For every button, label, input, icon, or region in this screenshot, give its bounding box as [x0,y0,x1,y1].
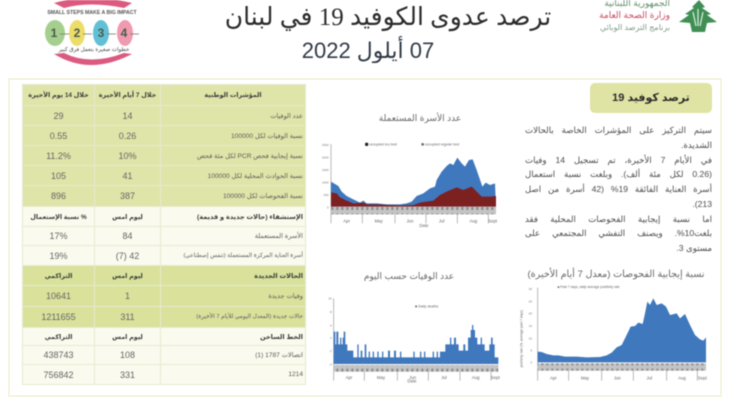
table: national indicators: 387 [120,191,135,201]
chart: PCR positivity area chart: May [581,375,590,380]
logo: small steps campaign: SMALL STEPS MAKE A BIG IMPACT [47,10,137,16]
logo: ministry of public health: برنامج الترصد الوبائي [600,23,670,32]
chart: occupied beds area chart: Jul [439,219,444,224]
chart: PCR positivity area chart: 25 [529,299,532,303]
table: national indicators: المؤشرات الوطنية [204,92,262,99]
chart: occupied beds area chart: Sept [488,219,498,224]
table: national indicators: ليوم امس [112,214,143,220]
table: national indicators: نسبة الحوادث المحلية لكل 100000 [208,172,303,180]
chart: PCR positivity area chart: Apr [550,375,557,380]
table: national indicators: خلال 7 أيام الأخيرة [99,92,156,99]
table: national indicators: الحالات الجديدة [254,272,303,280]
table: national indicators: الإستشفاء (حالات جديدة و قديمة) [197,214,303,220]
table: national indicators: اتصالات 1787 (1) [255,352,303,359]
text block: summary [524,125,712,254]
table: national indicators [22,84,306,386]
table: national indicators: 0.55 [50,130,67,140]
chart: occupied beds area chart: 500 [324,193,329,197]
chart: occupied beds area chart: occupied icu bed [369,143,397,147]
chart: daily deaths step chart: 10 [328,297,332,301]
logo: ministry of public health: وزارة الصحة العامة [599,10,670,20]
chart: daily deaths step chart: 2 [330,349,332,353]
chart: occupied beds area chart: 2500 [322,143,329,147]
text block: summary: اما نسبة إيجابية الفحوصات المحلية فقد [525,214,712,224]
chart: occupied beds area chart: 1500 [322,168,329,172]
text block: summary: أسرة العناية الفائقة 19% (42 أسرة من اصل [525,184,712,194]
chart: occupied beds area chart: Date [419,223,429,228]
chart: occupied beds area chart [322,142,498,228]
chart: daily deaths step chart: Date [407,378,417,383]
chart: daily deaths step chart: Jun [409,375,417,380]
table: national indicators: 331 [120,370,135,380]
chart: daily deaths step chart: Aug [472,375,480,380]
chart title: daily deaths: عدد الوفيات حسب اليوم [364,271,454,281]
chart: occupied beds area chart: May [375,219,384,224]
table: national indicators: نسبة الوفيات لكل 100000 [231,132,303,140]
table: national indicators: 14 [122,110,132,120]
table: national indicators: 105 [51,170,66,180]
table: national indicators: ليوم امس [112,334,143,340]
chart: daily deaths step chart: May [377,375,386,380]
text block: summary: سيتم التركيز على المؤشرات الخاصة بالحالات [525,125,712,135]
chart: occupied beds area chart: 1000 [322,180,329,184]
chart: PCR positivity area chart: 10 [529,336,532,340]
logo: ministry of public health [599,0,718,33]
chart: PCR positivity area chart: 30 [529,287,532,291]
chart: PCR positivity area chart: Sept [698,375,708,380]
table: national indicators: 1 [125,291,130,301]
table: national indicators: 10641 [46,291,71,301]
text block: summary: مستوى 3. [676,243,712,253]
chart: occupied beds area chart: Aug [469,219,478,224]
table: national indicators: وفيات جديدة [268,293,303,300]
table: national indicators: حالات جديدة (المعدل اليومي للأيام 7 الأخيرة) [196,314,303,320]
text block: summary: الشديدة. [681,140,712,150]
chart: daily deaths step chart: 8 [330,310,332,314]
chart: PCR positivity area chart: ■ Past 7 days, daily average positivity rate [557,285,620,289]
table: national indicators: 1214 [288,371,303,378]
chart: daily deaths step chart: 0 [330,362,332,366]
chart: PCR positivity area chart: 20 [529,312,532,316]
logo: small steps campaign: 2 [74,26,81,40]
chart: occupied beds area chart: Apr [343,219,351,224]
table: national indicators: % نسبة الإستعمال [30,214,87,220]
table: national indicators: نسبة إيجابية فحص PCR لكل مئة فحص [197,152,303,160]
table: national indicators: خلال 14 يوم الأخيرة [28,92,89,99]
table: national indicators: 756842 [43,370,74,380]
chart: daily deaths step chart: 4 [330,336,332,340]
table: national indicators: نسبة الفحوصات لكل 100000 [223,193,303,200]
table: national indicators: 10% [118,150,136,160]
table: national indicators: 1211655 [41,312,76,322]
main panel frame [8,78,722,397]
chart title: occupied beds: عدد الأسرة المستعملة [379,113,461,123]
chart title: PCR positivity: نسبة إيجابية الفحوصات (معدل 7 أيام الأخيرة) [527,269,705,280]
table: national indicators: أسرة العناية المركزة المستعملة (تنفس إصطناعي) [183,252,303,258]
text block: summary: في الأيام 7 الأخيرة، تم تسجيل 14 وفيات [525,154,712,164]
table: national indicators: 0.26 [119,130,136,140]
title: ترصد عدوى الكوفيد 19 في لبنان [225,4,551,31]
text block: summary: 213). [692,199,712,209]
logo: small steps campaign: خطوات صغيرة بتعمل فرق كبير [58,46,129,53]
heading: covid-19 surveillance [590,83,712,113]
chart: daily deaths step chart: Apr [346,375,353,380]
chart: daily deaths step chart: ■ Daily deaths [415,305,439,309]
text block: summary: (0.26 لكل مئة ألف). وبلغت نسبة استعمال [525,169,712,179]
table: national indicators: 108 [120,350,135,360]
chart: PCR positivity area chart: Jun [614,375,621,380]
table: national indicators: 29 [53,110,64,120]
table: national indicators: التراكمي [45,272,72,280]
table: national indicators: التراكمي [45,334,72,340]
text block: summary: بلغت10%. ويصنف التفشي المجتمعي على [525,228,712,238]
chart: PCR positivity area chart: positivity rate (%, average past 7 days) [520,310,524,367]
table: national indicators: (7) 42 [116,250,139,260]
chart: occupied beds area chart: occupied regular bed [425,143,459,147]
table: national indicators: 84 [122,231,132,241]
table: national indicators: 311 [120,312,135,322]
table: national indicators: 11.2% [46,150,71,160]
chart: occupied beds area chart: 0 [327,205,329,209]
table: national indicators: 19% [49,250,68,260]
chart: occupied beds area chart: Jun [407,219,414,224]
chart: daily deaths step chart [328,297,501,384]
table: national indicators: الأسرة المستعملة [255,233,303,240]
chart: PCR positivity area chart: 5 [530,348,532,352]
table: national indicators: الخط الساخن [260,334,303,340]
chart: PCR positivity area chart: 15 [529,324,532,328]
logo: small steps campaign: 4 [121,26,128,40]
date: 07 أيلول 2022 [302,38,434,63]
chart: PCR positivity area chart: 0 [530,361,532,365]
chart: daily deaths step chart: Jul [441,375,447,380]
logo: small steps campaign [44,0,140,66]
table: national indicators: 17% [49,231,68,241]
chart: daily deaths step chart: 6 [330,323,332,327]
chart: PCR positivity area chart: Jul [647,375,652,380]
table: national indicators: 41 [122,170,132,180]
table: national indicators: 896 [51,191,66,201]
chart: daily deaths step chart: Sept [491,375,501,380]
chart: PCR positivity area chart: Aug [678,375,686,380]
table: national indicators: عدد الوفيات [270,112,303,120]
chart: occupied beds area chart: 2000 [322,156,329,160]
chart: PCR positivity area chart [520,285,708,381]
logo: small steps campaign: 3 [98,26,105,40]
table: national indicators: ليوم امس [112,272,143,280]
table: national indicators: 438743 [43,350,74,360]
logo: small steps campaign: 1 [51,26,58,40]
heading: covid-19 surveillance: ترصد كوفيد 19 [612,92,690,104]
